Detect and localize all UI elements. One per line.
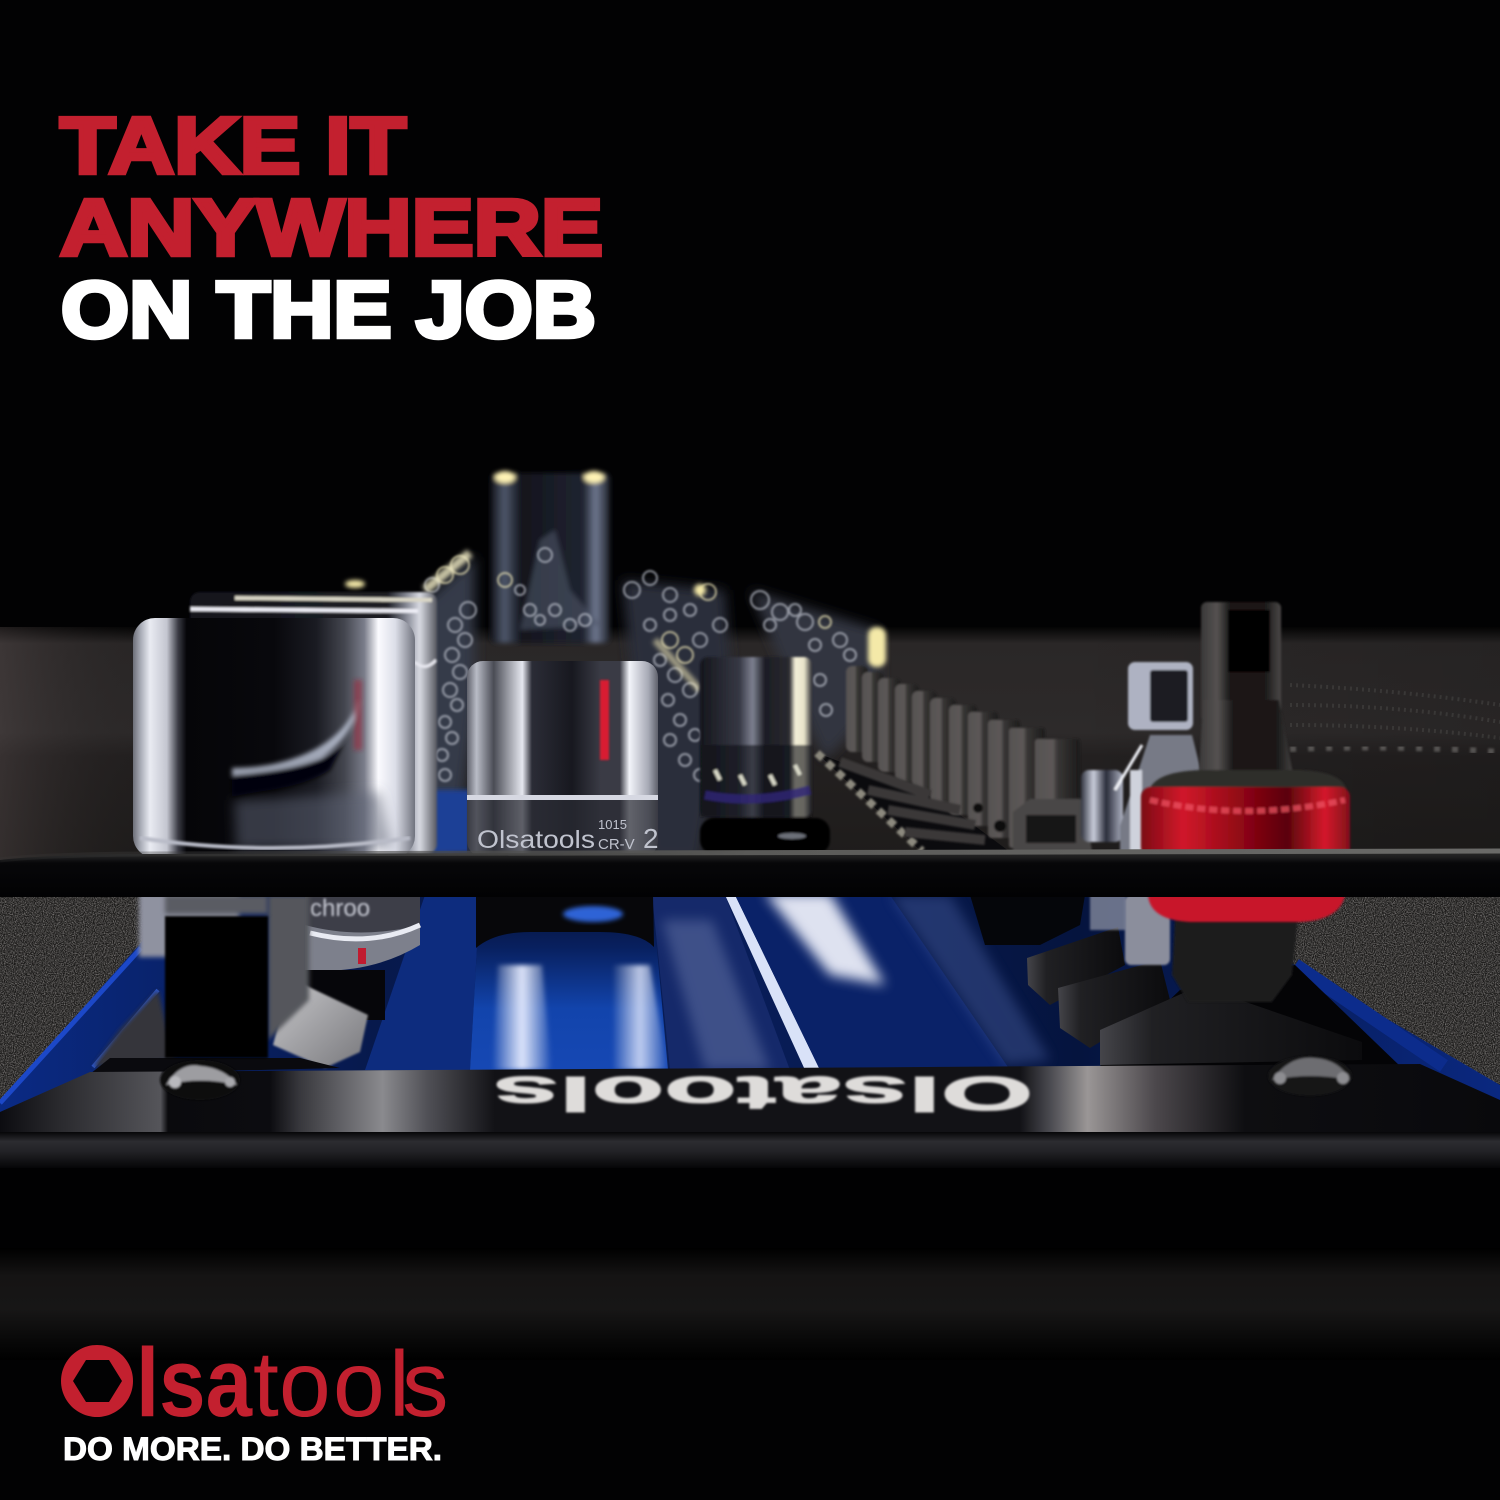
front end plate with brushed reflections xyxy=(0,1064,1500,1145)
medium chrome socket with engraved marking: Olsatools xyxy=(477,826,595,854)
headline line: take it: TAKE IT xyxy=(60,101,406,190)
lower work mat, left and right xyxy=(0,895,1500,1105)
row of hex bits xyxy=(817,666,1092,852)
left reflected socket and mount xyxy=(90,893,420,1074)
logo wordmark light: tools xyxy=(253,1332,448,1436)
medium chrome socket with engraved marking xyxy=(467,652,659,857)
logo hex O xyxy=(61,1345,133,1417)
mirrored logo on the end plate: Olsatools xyxy=(493,1066,1033,1119)
foreground black rail crossing the tray xyxy=(0,851,1500,897)
work surface behind the tray xyxy=(0,627,1500,862)
chrome ratchet adapter xyxy=(1081,662,1202,855)
brand logo xyxy=(61,1328,448,1437)
screw left xyxy=(160,1060,240,1100)
front edge of tray xyxy=(0,1132,1500,1263)
tray channels xyxy=(365,893,1050,1070)
bright blurred highlights xyxy=(345,553,886,690)
dark rung bed under the bits xyxy=(817,753,1010,852)
tall blurred socket in the background xyxy=(490,471,610,643)
second socket behind the large socket xyxy=(190,592,437,854)
headline line: on the job: ON THE JOB xyxy=(61,265,596,354)
headline line: anywhere: ANYWHERE xyxy=(60,183,603,272)
ratchet with red knurled ring xyxy=(1141,602,1350,857)
medium chrome socket with engraved marking: 1015 xyxy=(598,817,627,832)
left reflected socket and mount: chroo xyxy=(310,895,370,922)
tagline: DO MORE. DO BETTER. xyxy=(63,1431,442,1467)
medium chrome socket with engraved marking: CR-V xyxy=(598,836,635,853)
dim haze of blurred socket rows xyxy=(425,555,880,860)
small blurred socket xyxy=(700,657,830,854)
blue anodised tray xyxy=(0,893,1500,1125)
screw right xyxy=(1268,1056,1352,1096)
large chrome socket xyxy=(133,618,415,858)
blurred bokeh rows of sockets xyxy=(425,548,856,781)
black clip under rail xyxy=(476,895,654,948)
headline xyxy=(60,101,603,354)
floor fading to black xyxy=(0,1248,1500,1360)
logo wordmark bold: lsa xyxy=(136,1328,253,1437)
tray channel behind sockets xyxy=(425,790,470,853)
medium chrome socket with engraved marking: 2 xyxy=(643,823,659,854)
right clips and lower ratchet body xyxy=(970,895,1400,1066)
